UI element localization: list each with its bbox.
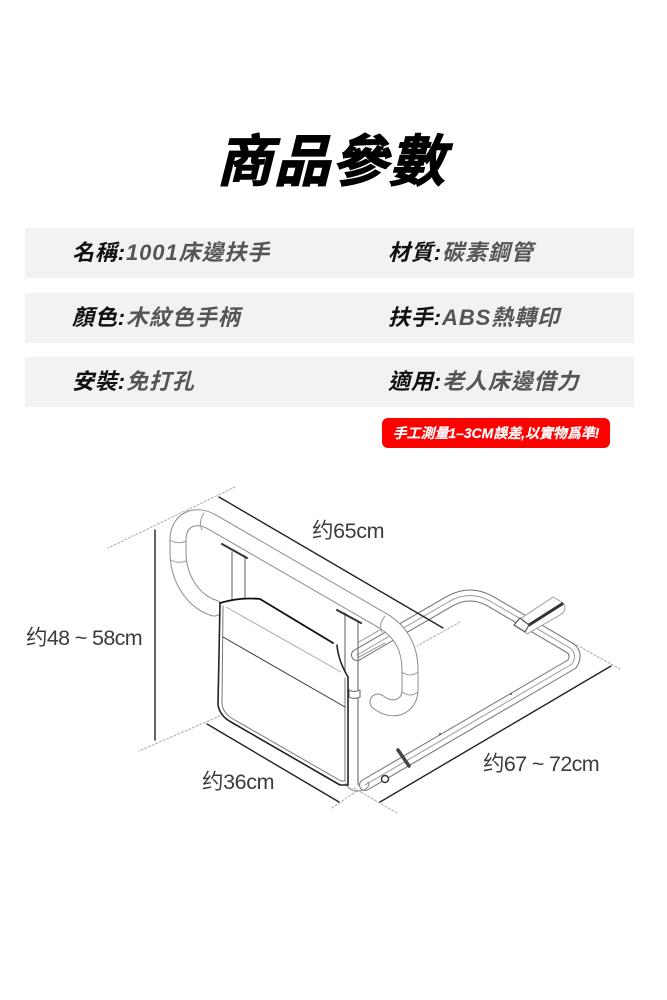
spec: handrail: 扶手:ABS熱轉印 bbox=[388, 305, 560, 330]
spec: installation: 安裝:免打孔 bbox=[72, 369, 195, 394]
spec: name: 名稱:1001床邊扶手 bbox=[72, 240, 270, 265]
label: 65cm: 约65cm bbox=[312, 519, 384, 543]
spec row 2 bbox=[25, 293, 634, 343]
upper handrail tube bbox=[170, 513, 418, 708]
callout: measurement tolerance bbox=[382, 418, 610, 448]
label: 36cm: 约36cm bbox=[202, 770, 274, 794]
spec: material: 材質:碳素鋼管 bbox=[388, 240, 534, 265]
callout: measurement tolerance: 手工測量1–3CM誤差,以實物爲準! bbox=[393, 425, 599, 441]
title: 商品參數 bbox=[216, 130, 446, 193]
cross bars between posts bbox=[359, 627, 385, 657]
support posts bbox=[222, 544, 369, 791]
spec row 3 bbox=[25, 357, 634, 407]
label: width: 约67 ~ 72cm bbox=[483, 752, 599, 776]
spec: usage: 適用:老人床邊借力 bbox=[388, 369, 579, 394]
icon: bolt bbox=[382, 776, 388, 782]
dimension line: width bbox=[380, 666, 611, 802]
handle card on frame bbox=[514, 597, 565, 634]
dimension line: depth 36cm bbox=[207, 724, 339, 802]
dimension line: length 65cm bbox=[219, 497, 443, 628]
dashed extension lines bbox=[108, 487, 620, 813]
base frame bbox=[357, 596, 575, 785]
spec: colour: 顏色:木紋色手柄 bbox=[72, 305, 241, 330]
dimension line: height bbox=[154, 530, 156, 740]
holes in frame bbox=[510, 693, 512, 695]
spec row 1 bbox=[25, 228, 634, 278]
icon: adjustable sleeve bbox=[398, 750, 409, 766]
storage bag bbox=[218, 598, 348, 785]
label: height: 约48 ~ 58cm bbox=[26, 626, 142, 650]
